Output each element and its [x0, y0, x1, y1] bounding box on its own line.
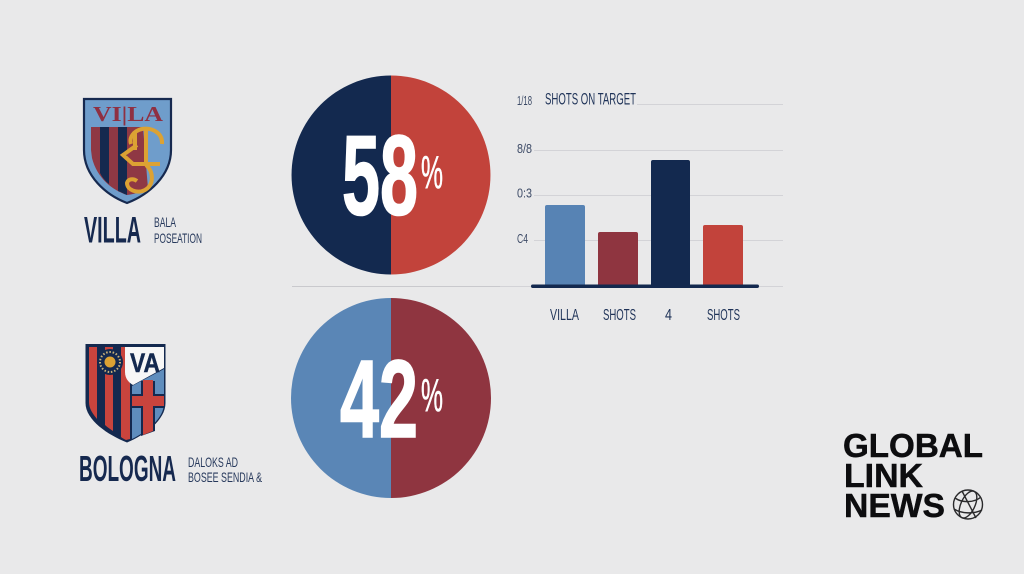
icon: Villa crest: VI|LA [93, 102, 164, 126]
x axis labels: 4 [665, 307, 672, 324]
icon: Bologna crest [86, 344, 166, 442]
x axis labels: SHOTS [603, 307, 636, 324]
y axis labels: 0:3 [517, 186, 532, 200]
chart: Villa possession donut: 58 [342, 112, 418, 238]
label: Villa possession: POSEATION [154, 230, 202, 246]
label: Bologna text: BOSEE SENDIA & [188, 469, 262, 485]
chart: Villa possession donut: % [421, 146, 443, 198]
emblem [97, 349, 123, 375]
team name: Villa: VILLA [84, 210, 141, 250]
label: Bologna text: DALOKS AD [188, 454, 238, 470]
chart: shots on target bars [500, 90, 783, 324]
y axis labels: 1/18 [517, 93, 532, 108]
chart: Villa possession donut [292, 76, 490, 274]
logo: Global Link News: NEWS [844, 487, 945, 524]
x axis labels [550, 307, 740, 324]
bars [545, 205, 743, 285]
divider [292, 286, 532, 287]
chart: Bologna possession donut [291, 298, 491, 498]
panel: Bologna team [79, 344, 262, 489]
y axis labels [517, 93, 532, 246]
chart: Bologna possession donut: 42 [340, 338, 418, 461]
panel: Villa team [84, 99, 202, 250]
label: Villa possession: BALA [154, 214, 176, 230]
team name: Bologna: BOLOGNA [79, 448, 176, 489]
x axis labels: SHOTS [707, 307, 740, 324]
bar: navy [651, 160, 690, 288]
logo: Global Link News: LINK [844, 457, 923, 494]
label: Bologna text [188, 454, 262, 485]
icon: globe [954, 488, 982, 521]
chart: Bologna possession donut: % [421, 369, 443, 421]
y axis labels: 8/8 [517, 141, 532, 156]
x axis labels: VILLA [550, 307, 579, 324]
logo: Global Link News [843, 427, 983, 524]
logo: Global Link News: GLOBAL [843, 427, 983, 464]
icon: Villa crest [84, 99, 171, 203]
label: Villa possession [154, 214, 202, 246]
icon: Bologna crest: VA [130, 348, 160, 378]
y axis labels: C4 [517, 231, 528, 246]
baseline [531, 284, 759, 288]
chart title: SHOTS ON TARGET [545, 90, 636, 108]
